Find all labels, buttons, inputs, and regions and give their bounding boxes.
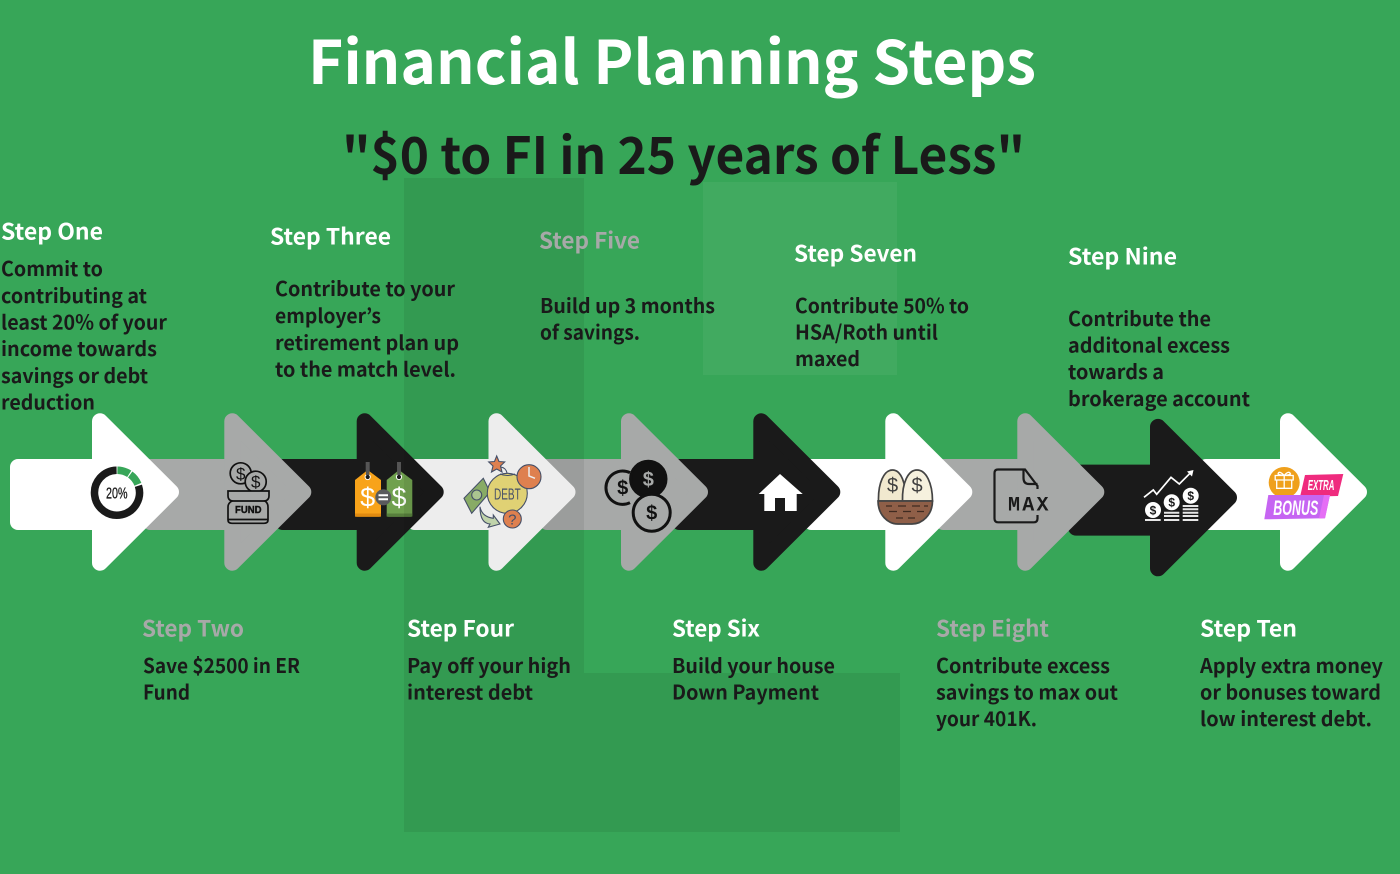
icon: growth chart with coins: $ — [1168, 496, 1175, 510]
arrow: step seven — [803, 421, 964, 563]
icon: MAX document — [994, 470, 1048, 522]
icon: three dollar coins: $ — [617, 478, 628, 500]
arrow: step three — [275, 421, 436, 563]
icon: equal price tags: $ — [360, 482, 375, 512]
text block: step six: Down Payment — [672, 676, 820, 706]
text block: step two: Fund — [143, 676, 190, 706]
icon: equal price tags: $ — [391, 482, 407, 512]
text block: step ten — [1199, 612, 1384, 732]
text block: step four: Step Four — [407, 612, 514, 644]
icon: extra bonus badge — [1264, 467, 1343, 520]
icon: growth chart with coins: $ — [1187, 489, 1194, 503]
icon: three dollar coins: $ — [643, 469, 654, 491]
icon: nest eggs: $ — [887, 475, 898, 497]
text block: step seven: Contribute 50% to — [795, 290, 969, 319]
text block: step ten: or bonuses toward — [1200, 676, 1381, 706]
icon: growth chart with coins: $ — [1150, 503, 1157, 517]
arrow: step eight — [935, 421, 1096, 563]
text block: step three: to the match level. — [275, 354, 456, 382]
icon: 20 percent donut — [94, 470, 139, 515]
arrow: step one — [10, 421, 171, 563]
icon: fund jar with coins — [228, 463, 269, 523]
text block: step two: Save $2500 in ER — [143, 650, 300, 679]
text block: step five — [539, 224, 715, 346]
icon: debt apple with clock, money and question mark — [464, 456, 541, 528]
icon: fund jar with coins: FUND — [235, 505, 262, 516]
text block: step ten: Step Ten — [1200, 612, 1297, 644]
arrow: step two — [142, 421, 303, 563]
icon: fund jar with coins: $ — [251, 473, 261, 492]
text block: step two: Step Two — [142, 612, 244, 644]
arrow: step five — [539, 421, 700, 563]
text block: step eight: savings to max out — [936, 676, 1119, 706]
text block: step five: Step Five — [539, 224, 640, 256]
text block: step three: employer’s — [275, 300, 381, 329]
text block: step one: Commit to — [1, 253, 103, 282]
text block: step nine: Step Nine — [1068, 240, 1177, 272]
text block: step nine: towards a — [1068, 356, 1164, 385]
text block: step eight: Step Eight — [936, 612, 1050, 644]
text block: step nine: Contribute the — [1068, 303, 1211, 332]
text block: step nine — [1068, 240, 1251, 412]
arrow: step four — [406, 421, 568, 563]
text block: step nine: additonal excess — [1068, 330, 1230, 358]
icon: three dollar coins — [606, 461, 670, 531]
text block: step seven: maxed — [795, 343, 860, 372]
text block: step five: of savings. — [540, 316, 640, 346]
text block: step five: Build up 3 months — [540, 290, 715, 319]
icon: MAX document: MAX — [1008, 495, 1048, 518]
icon: extra bonus badge: EXTRA — [1308, 477, 1334, 494]
text block: step seven: HSA/Roth until — [795, 316, 938, 346]
icon: debt apple with clock, money and question mark: ? — [508, 512, 516, 528]
icon: house — [759, 474, 803, 511]
icon: extra bonus badge: BONUS — [1273, 497, 1318, 520]
text block: step ten: low interest debt. — [1200, 703, 1372, 732]
text block: step one: contributing at — [1, 280, 148, 309]
text block: step four: interest debt — [407, 676, 534, 706]
text block: step four: Pay off your high — [407, 650, 571, 679]
text block: step six — [672, 612, 835, 706]
text block: step three — [270, 220, 459, 382]
text block: step one: income towards — [1, 333, 157, 362]
icon: fund jar with coins: $ — [236, 464, 246, 484]
text block: step one: Step One — [1, 214, 103, 246]
subtitle: "$0 to FI in 25 years of Less" — [342, 115, 1025, 189]
icon: three dollar coins: $ — [646, 503, 657, 525]
text block: step nine: brokerage account — [1068, 383, 1251, 412]
text block: step one: reduction — [1, 386, 95, 416]
text block: step three: Step Three — [270, 220, 391, 252]
text block: step six: Step Six — [672, 612, 760, 644]
text block: step one: least 20% of your — [1, 306, 167, 336]
icon: 20 percent donut: 20% — [106, 485, 128, 502]
text block: step one: savings or debt — [1, 360, 149, 389]
text block: step one — [1, 214, 167, 416]
title: Financial Planning Steps — [308, 15, 1036, 102]
icon: debt apple with clock, money and question mark: DEBT — [494, 486, 521, 503]
icon: nest eggs: $ — [911, 475, 923, 497]
text block: step six: Build your house — [672, 650, 835, 679]
icon: equal price tags — [355, 462, 412, 517]
text block: step ten: Apply extra money — [1199, 650, 1384, 679]
arrow: step six — [671, 421, 832, 563]
text block: step seven: Step Seven — [794, 236, 917, 268]
icon: nest eggs — [878, 470, 932, 524]
icon: growth chart with coins — [1144, 470, 1199, 521]
text block: step three: retirement plan up — [275, 327, 459, 356]
arrow: step ten — [1198, 421, 1359, 563]
text block: step eight — [936, 612, 1119, 732]
text block: step four — [407, 612, 571, 706]
text block: step eight: your 401K. — [936, 703, 1037, 732]
arrow: step nine — [1068, 427, 1229, 568]
text block: step seven — [794, 236, 969, 372]
text block: step three: Contribute to your — [275, 273, 455, 302]
text block: step two — [142, 612, 300, 706]
text block: step eight: Contribute excess — [936, 650, 1110, 679]
